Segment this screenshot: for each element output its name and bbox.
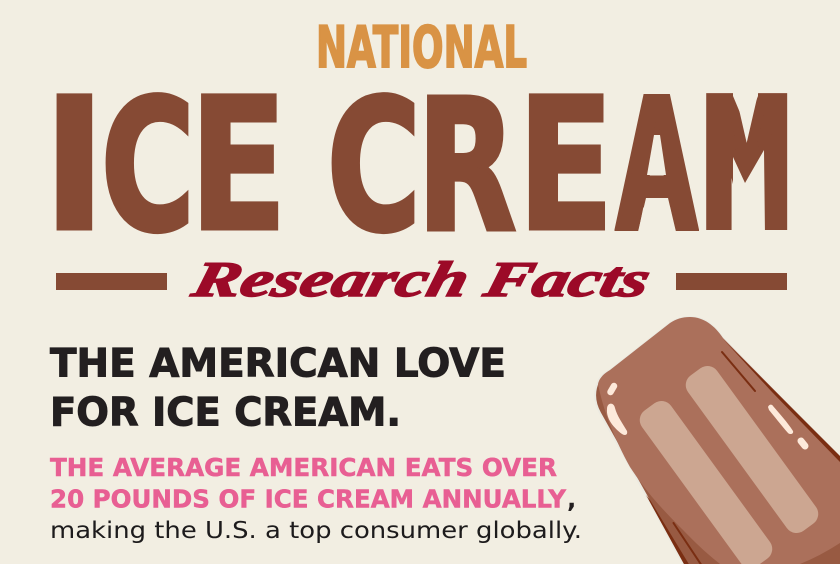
highlight long right [768,405,793,434]
title: ICE CREAM: E [517,59,615,273]
highlight small right [801,441,805,446]
pink statistic text: 20 POUNDS OF ICE CREAM ANNUALLY [50,484,566,514]
heading: FOR ICE CREAM. [50,390,401,436]
heading [50,342,506,436]
title: ICE CREAM: I [42,59,106,273]
title: ICE CREAM: M [703,71,790,260]
title: NATIONAL: NATIONAL [316,15,527,80]
popsicle base shadow [595,317,840,564]
body text: making the U.S. a top consumer globally. [50,516,582,544]
title: ICE CREAM: A [617,63,696,269]
popsicle main face [598,317,840,564]
left edge dark strip [646,495,690,564]
pink statistic text: , [567,484,576,514]
title: ICE CREAM: R [417,60,516,272]
title: ICE CREAM: C [101,60,195,272]
highlight small left [610,386,614,392]
subtitle rule right [676,272,787,290]
title: ICE CREAM [42,59,790,273]
title: ICE CREAM: C [327,60,421,272]
title letter counters [638,93,765,231]
subtitle: Research Facts: Research Facts [186,252,656,307]
highlight long left [607,404,627,435]
subtitle rule left [56,272,167,290]
pink statistic text [50,453,576,514]
right edge dark strip [723,339,840,462]
pink statistic text: THE AVERAGE AMERICAN EATS OVER [50,453,557,482]
dark line upper [722,352,755,391]
dark line lower [674,523,702,564]
groove left [635,396,777,564]
groove right [681,361,823,538]
heading: THE AMERICAN LOVE [50,342,506,386]
title: ICE CREAM: E [189,59,288,273]
